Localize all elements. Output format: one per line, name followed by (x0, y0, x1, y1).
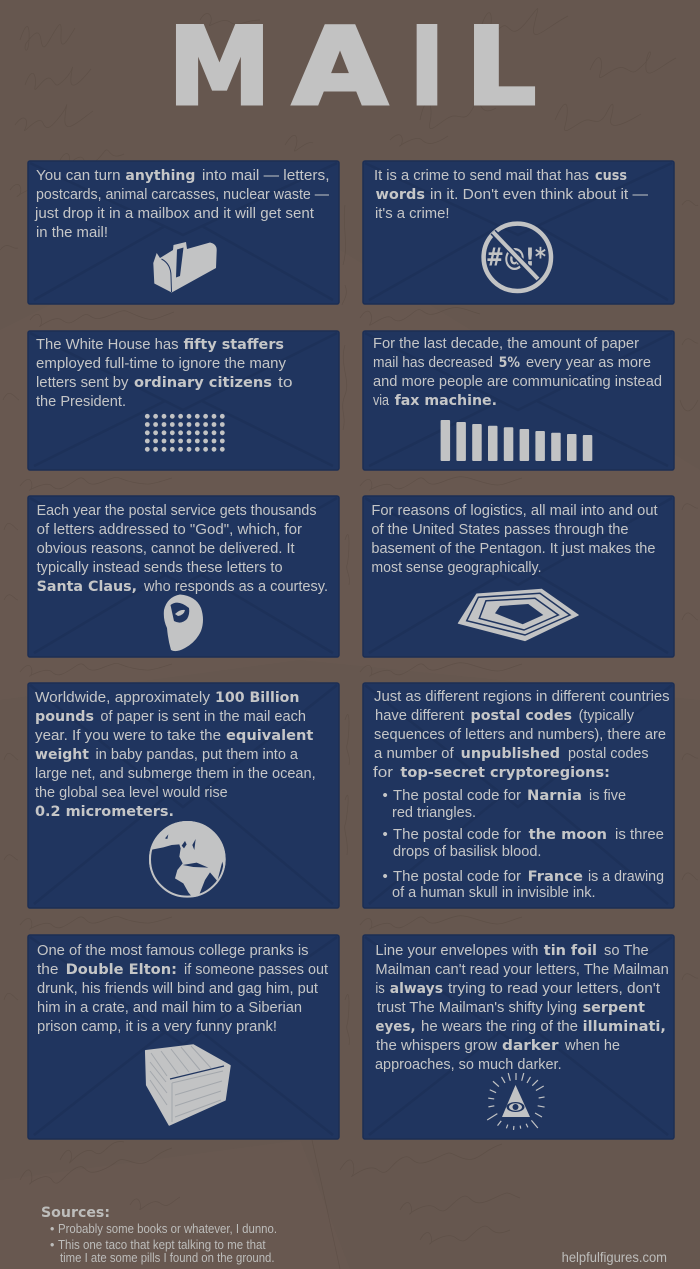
icon: grid of fifty dots (145, 414, 225, 452)
icon: Pentagon (458, 589, 578, 641)
bullet list: secret postal codes: drops of basilisk blood. (393, 843, 542, 860)
sources: • (50, 1222, 54, 1236)
text block (37, 502, 328, 595)
title: M (168, 6, 270, 129)
text block: in it. Don't even think about it — (430, 186, 648, 203)
text block: trust The Mailman's shifty lying (377, 999, 577, 1016)
text block: cuss (595, 168, 627, 184)
text block: One of the most famous college pranks is (37, 942, 308, 959)
icon: no cussing symbol (484, 224, 551, 291)
text block: always (390, 981, 443, 997)
text block: prison camp, it is a very funny prank! (37, 1018, 277, 1035)
title (168, 6, 536, 129)
sources: Probably some books or whatever, I dunno. (58, 1222, 277, 1236)
text block: the (37, 961, 58, 978)
text block: It is a crime to send mail that has (374, 167, 589, 184)
panel: tin foil (363, 935, 674, 1139)
text block: of letters addressed to "God", which, for (37, 521, 302, 538)
text block: equivalent (226, 728, 314, 744)
text block: a number of (374, 745, 454, 762)
text block: is (375, 980, 385, 997)
text block: Worldwide, approximately (35, 689, 211, 706)
text block: via (373, 392, 390, 409)
panel: letters to God (28, 496, 339, 657)
text block: so The (604, 942, 649, 959)
sources: This one taco that kept talking to me that (58, 1238, 266, 1252)
text block: drunk, his friends will bind and gag him, put (37, 980, 319, 997)
text block: obvious reasons, cannot be delivered. It (37, 540, 295, 557)
text block (36, 336, 292, 410)
text block: who responds as a courtesy. (143, 578, 328, 595)
bullet list: secret postal codes: The postal code for (393, 826, 521, 843)
bullet list: secret postal codes: • (382, 787, 388, 804)
text block: The White House has (36, 336, 178, 353)
text block: typically instead sends these letters to (37, 559, 283, 576)
text block: sequences of letters and numbers), there are (374, 726, 666, 743)
text block: ordinary citizens (134, 375, 272, 391)
bullet list: secret postal codes: • (382, 868, 388, 885)
text block: the global sea level would rise (35, 784, 228, 801)
text block: if someone passes out (184, 961, 329, 978)
text block: employed full-time to ignore the many (36, 355, 286, 372)
panel: anything into mail (28, 161, 339, 304)
sources: Sources: (41, 1205, 110, 1221)
panel: Pentagon (363, 496, 674, 657)
text block: top-secret cryptoregions: (400, 765, 610, 781)
text block: of paper is sent in the mail each (100, 708, 306, 725)
text block: Just as different regions in different countries (374, 688, 670, 705)
text block: mail has decreased (373, 354, 493, 371)
text block: 5% (499, 355, 520, 371)
text block: trying to read your letters, don't (448, 980, 661, 997)
bullet list: secret postal codes: The postal code for (393, 868, 521, 885)
text block: fifty staffers (184, 337, 284, 353)
title: A (293, 6, 387, 129)
bullet list: secret postal codes (382, 787, 664, 901)
text block: of the United States passes through the (371, 521, 629, 538)
text block: For reasons of logistics, all mail into and out (371, 502, 658, 519)
sources: • (50, 1238, 54, 1252)
text block: For the last decade, the amount of paper (373, 335, 639, 352)
text block: when he (564, 1037, 620, 1054)
text block: anything (125, 168, 195, 184)
sources (41, 1205, 277, 1265)
text block: the whispers grow (376, 1037, 497, 1054)
text block: eyes, (375, 1019, 416, 1035)
text block: it's a crime! (375, 205, 450, 222)
text block: approaches, so much darker. (375, 1056, 562, 1073)
text block: postal codes (470, 708, 572, 724)
text block: postcards, animal carcasses, nuclear waste — (36, 186, 329, 203)
text block: basement of the Pentagon. It just makes the (371, 540, 655, 557)
sources: time I ate some pills I found on the ground. (60, 1251, 274, 1265)
bullet list: secret postal codes: the moon (529, 827, 607, 843)
text block: the President. (36, 393, 126, 410)
text block: into mail — letters, (202, 167, 330, 184)
text block (374, 167, 648, 222)
panel: 100 billion pounds (28, 683, 339, 908)
text block: 0.2 micrometers. (35, 804, 174, 820)
panel: cuss words (363, 161, 674, 304)
text block (375, 942, 669, 1073)
icon: Santa's bearded head (164, 594, 203, 651)
text block: fax machine. (395, 393, 497, 409)
text block: 100 Billion (215, 690, 300, 706)
icon: wooden crate (146, 1045, 230, 1125)
text block (37, 942, 329, 1035)
bullet list: secret postal codes: is five (589, 787, 626, 804)
panel: fax machine (363, 331, 674, 470)
text block: pounds (35, 709, 94, 725)
text block: most sense geographically. (371, 559, 542, 576)
icon: all-seeing eye (487, 1073, 545, 1130)
text block: just drop it in a mailbox and it will get sent (34, 205, 315, 222)
text block (373, 688, 670, 781)
panel: postal codes (363, 683, 674, 908)
text block: have different (375, 707, 465, 724)
panel: Double Elton (28, 935, 339, 1139)
bullet list: secret postal codes: is a drawing (588, 868, 664, 885)
text block: and more people are communicating instead (373, 373, 662, 390)
text block: darker (502, 1038, 559, 1054)
text block: Santa Claus, (37, 579, 137, 595)
text block: Line your envelopes with (375, 942, 538, 959)
text block: Double Elton: (66, 962, 177, 978)
credit: helpfulfigures.com (562, 1249, 667, 1265)
text block: in baby pandas, put them into a (96, 746, 299, 763)
icon: globe (149, 821, 226, 898)
bullet list: secret postal codes: is three (615, 826, 664, 843)
text block (34, 167, 330, 241)
text block: for (373, 764, 393, 781)
title: I (410, 6, 444, 129)
text block: postal codes (568, 745, 649, 762)
text block (373, 335, 662, 409)
text block (35, 689, 316, 820)
text block: unpublished (461, 746, 560, 762)
bullet list: secret postal codes: The postal code for (393, 787, 521, 804)
text block (371, 502, 658, 576)
text block: words (376, 187, 425, 203)
bar chart: declining mail (441, 420, 592, 461)
text block: Mailman can't read your letters, The Mailman (375, 961, 669, 978)
text block: tin foil (544, 943, 597, 959)
text block: You can turn (36, 167, 120, 184)
title: L (466, 6, 536, 129)
icon: mailbox (153, 242, 217, 292)
text block: weight (35, 747, 89, 763)
bullet list: secret postal codes: red triangles. (392, 804, 476, 821)
text block: illuminati, (583, 1019, 666, 1035)
bullet list: secret postal codes: of a human skull in invisible ink. (392, 884, 596, 901)
text block: to (278, 374, 292, 391)
bullet list: secret postal codes: • (382, 826, 388, 843)
text block: large net, and submerge them in the ocean, (35, 765, 316, 782)
icon: no cussing symbol: #@!* (486, 242, 546, 272)
text block: every year as more (526, 354, 651, 371)
bullet list: secret postal codes: Narnia (527, 788, 582, 804)
text block: serpent (583, 1000, 645, 1016)
text block: Each year the postal service gets thousands (37, 502, 316, 519)
text block: he wears the ring of the (421, 1018, 578, 1035)
text block: (typically (579, 707, 634, 724)
text block: him in a crate, and mail him to a Siberian (37, 999, 302, 1016)
text block: year. If you were to take the (35, 727, 221, 744)
text block: letters sent by (36, 374, 129, 391)
panel: fifty staffers (28, 331, 339, 470)
bullet list: secret postal codes: France (528, 869, 583, 885)
text block: in the mail! (36, 224, 108, 241)
